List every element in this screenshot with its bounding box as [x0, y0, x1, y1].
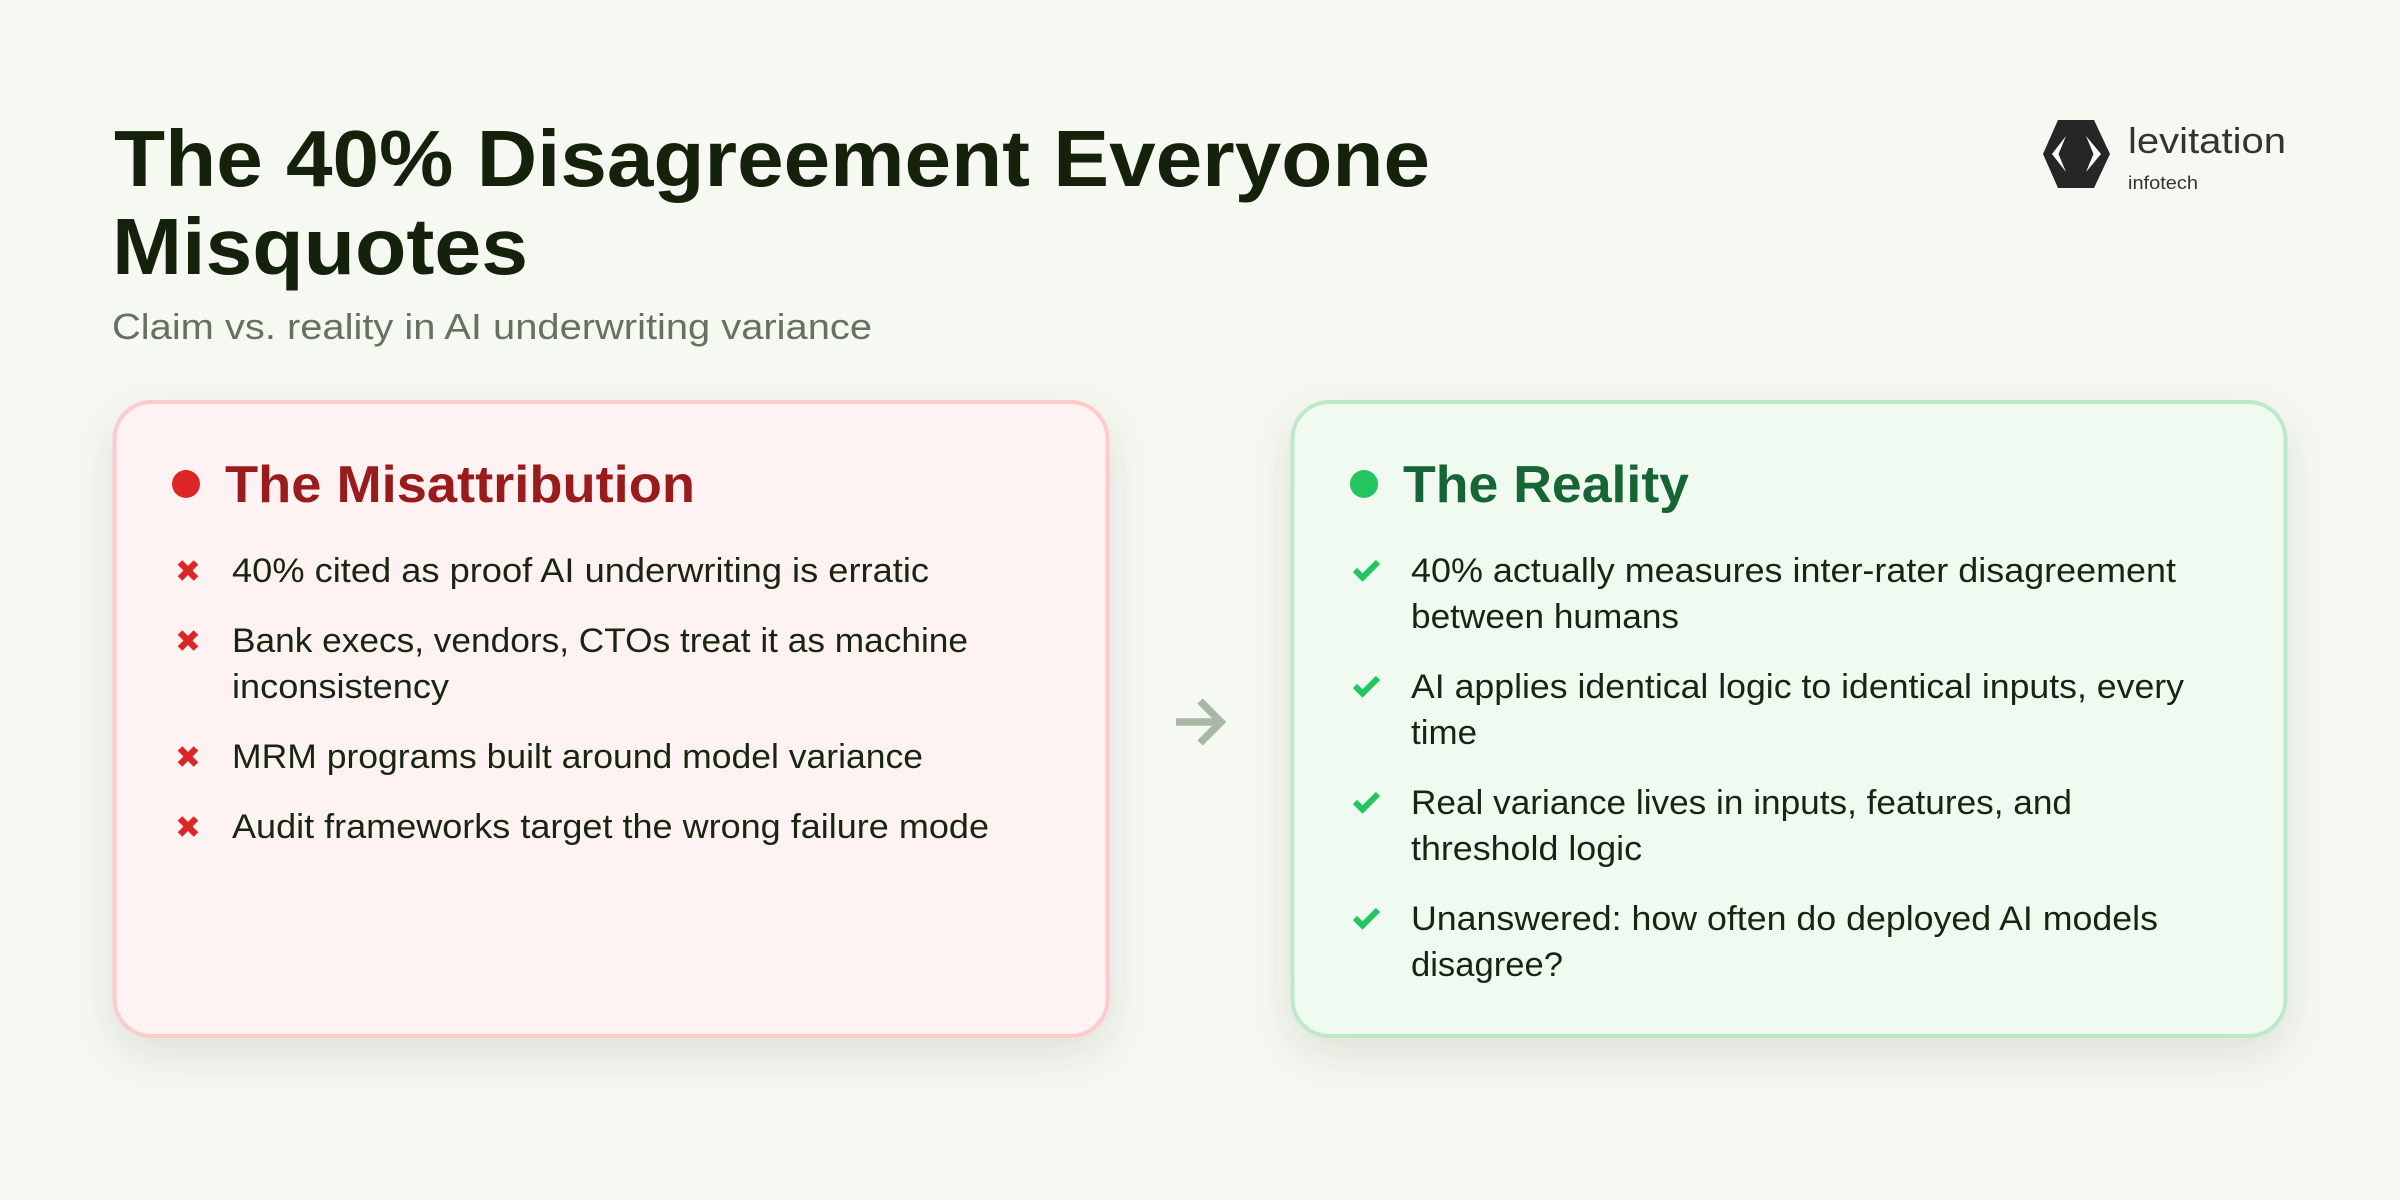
item: mrm programs: MRM programs built around model variance: [232, 738, 923, 776]
arrow: [1176, 701, 1222, 743]
item: inter-rater: between humans: [1411, 598, 1679, 636]
item: real variance: threshold logic: [1411, 830, 1642, 868]
item: inter-rater: 40% actually measures inter-rater disagreement: [1411, 552, 2177, 590]
item: unanswered: disagree?: [1411, 946, 1563, 984]
logo sub-wordmark: infotech: [2128, 173, 2198, 193]
item: 40% cited: 40% cited as proof AI underwriting is erratic: [232, 552, 929, 590]
item: identical logic: [1355, 668, 2184, 752]
heading: the misattribution: The Misattribution: [225, 456, 695, 514]
item: unanswered: [1355, 900, 2158, 984]
item: identical logic: time: [1411, 714, 1477, 752]
panel background: [114, 402, 1108, 1036]
item: bank execs: Bank execs, vendors, CTOs treat it as machine: [232, 622, 968, 660]
logo wordmark: levitation: [2128, 120, 2286, 161]
item: audit frameworks: Audit frameworks target the wrong failure mode: [232, 808, 989, 846]
subtitle: Claim vs. reality in AI underwriting variance: [112, 306, 872, 347]
panel: the reality: [1292, 402, 2286, 1036]
panel background: [1292, 402, 2286, 1036]
item: real variance: [1355, 784, 2072, 868]
item: identical logic: AI applies identical logic to identical inputs, every: [1411, 668, 2184, 706]
heading: the reality: The Reality: [1403, 456, 1689, 514]
title: Misquotes: [112, 202, 528, 291]
icon: hexagon logo mark: [2043, 120, 2110, 188]
item: inter-rater: [1355, 552, 2177, 636]
item: unanswered: Unanswered: how often do deployed AI models: [1411, 900, 2158, 938]
item: bank execs: inconsistency: [232, 668, 449, 706]
item: real variance: Real variance lives in inputs, features, and: [1411, 784, 2072, 822]
icon: green dot: [1350, 470, 1378, 498]
title: [112, 114, 1430, 291]
logo: levitation infotech: [2043, 120, 2286, 193]
icon: red dot: [172, 470, 200, 498]
title: The 40% Disagreement Everyone: [114, 114, 1430, 203]
panel: the misattribution: [114, 402, 1108, 1036]
item: bank execs: [180, 622, 968, 706]
